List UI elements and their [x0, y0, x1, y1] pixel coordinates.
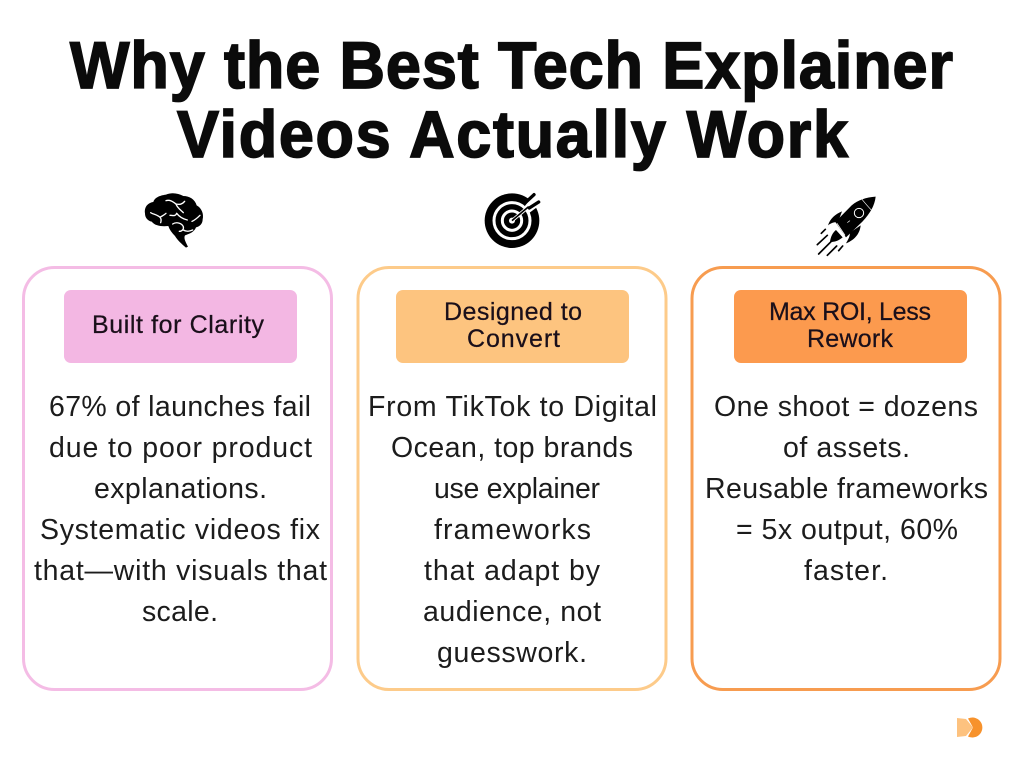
heading badge: built for clarity: Built for Clarity [92, 311, 264, 339]
text block: clarity body: explanations. [94, 473, 267, 505]
heading badge: max roi: Rework [807, 325, 894, 353]
text block: roi body: Reusable frameworks [705, 473, 988, 505]
text block: roi body [705, 391, 988, 587]
text block: convert body: audience, not [423, 596, 601, 628]
text block: convert body: frameworks [434, 514, 591, 546]
icon: brand logo [957, 718, 982, 738]
icon: brain [145, 193, 203, 248]
text block: convert body: guesswork. [437, 637, 587, 669]
text block: convert body: that adapt by [424, 555, 601, 587]
panel: built for clarity [24, 268, 332, 690]
title [70, 29, 953, 171]
icon: target with arrow [485, 193, 541, 248]
text block: convert body [368, 391, 657, 669]
heading badge: designed to convert [396, 290, 629, 363]
text block: clarity body: that—with visuals that [34, 555, 327, 587]
text block: roi body: One shoot = dozens [714, 391, 978, 423]
text block: roi body: of assets. [783, 432, 910, 464]
panel: max roi, less rework [692, 268, 1000, 690]
heading badge: designed to convert: Designed to [444, 298, 582, 326]
heading badge: max roi [734, 290, 967, 363]
text block: clarity body: due to poor product [49, 432, 312, 464]
text block: clarity body: scale. [142, 596, 218, 628]
text block: clarity body [34, 391, 327, 628]
text block: clarity body: Systematic videos fix [40, 514, 320, 546]
title: Videos Actually Work [177, 98, 848, 171]
text block: convert body: use explainer [434, 473, 600, 505]
title: Why the Best Tech Explainer [70, 29, 953, 102]
text block: convert body: Ocean, top brands [391, 432, 633, 464]
icon: rocket [817, 197, 876, 255]
text block: roi body: = 5x output, 60% [736, 514, 958, 546]
text block: clarity body: 67% of launches fail [49, 391, 311, 423]
text block: roi body: faster. [804, 555, 888, 587]
panel: designed to convert [358, 268, 666, 690]
text block: convert body: From TikTok to Digital [368, 391, 657, 423]
heading badge: designed to convert: Convert [467, 325, 560, 353]
heading badge: max roi: Max ROI, Less [769, 298, 931, 326]
heading badge: built for clarity [64, 290, 297, 363]
